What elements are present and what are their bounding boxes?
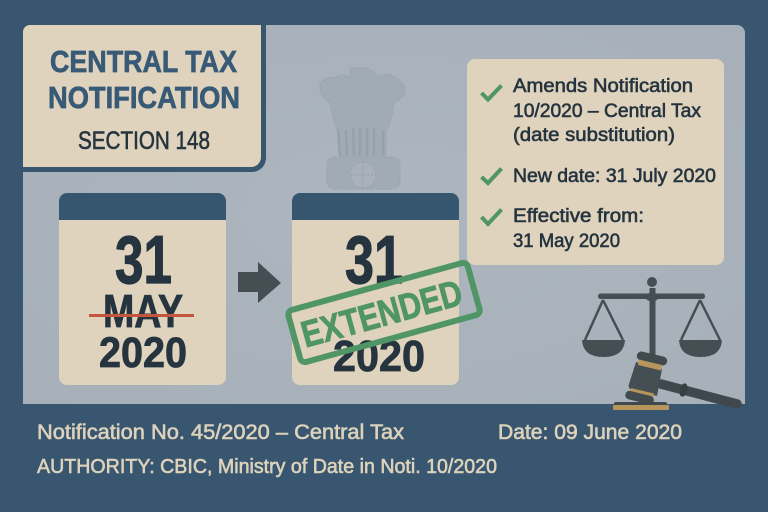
panel: title card [23,25,266,172]
calendar: extended date: 31 [345,222,403,298]
icon: check 2 [482,168,502,183]
calendar: original date: MAY [103,285,183,337]
text: amends notification: Amends Notification [513,75,693,97]
calendar: extended date: 2020 [333,332,425,381]
text: effective from: Effective from: [513,205,644,227]
arrow [238,262,281,303]
text: effective from: 31 May 2020 [513,230,620,252]
calendar: original date: 2020 [99,329,187,377]
text: amends notification: 10/2020 – Central Tax [513,100,701,122]
calendar: original date: 31 [115,222,172,298]
calendar: extended date [292,193,459,385]
icon: faint national emblem [320,68,405,189]
subheading: section 148: SECTION 148 [78,127,210,155]
text: amends notification [513,75,701,146]
footer: notification number: Notification No. 45/2020 – Central Tax [37,421,405,444]
stamp: extended: EXTENDED [297,272,467,355]
panel: key points [467,59,724,265]
strike-through line [89,314,194,317]
footer: date: Date: 09 June 2020 [498,421,682,444]
footer: authority: AUTHORITY: CBIC, Ministry of Date in Noti. 10/2020 [37,456,497,478]
icon: check 1 [482,86,502,100]
heading: central tax: CENTRAL TAX [50,45,238,79]
heading: notification: NOTIFICATION [48,81,240,115]
icon: gavel [613,351,737,410]
text: amends notification: (date substitution) [513,124,675,146]
text: effective from [513,205,644,252]
panel: main grey background [23,25,745,404]
calendar: original date [59,193,226,385]
icon: scales of justice [582,277,722,358]
text: new date: New date: 31 July 2020 [513,165,716,187]
icon: check 3 [482,210,502,224]
